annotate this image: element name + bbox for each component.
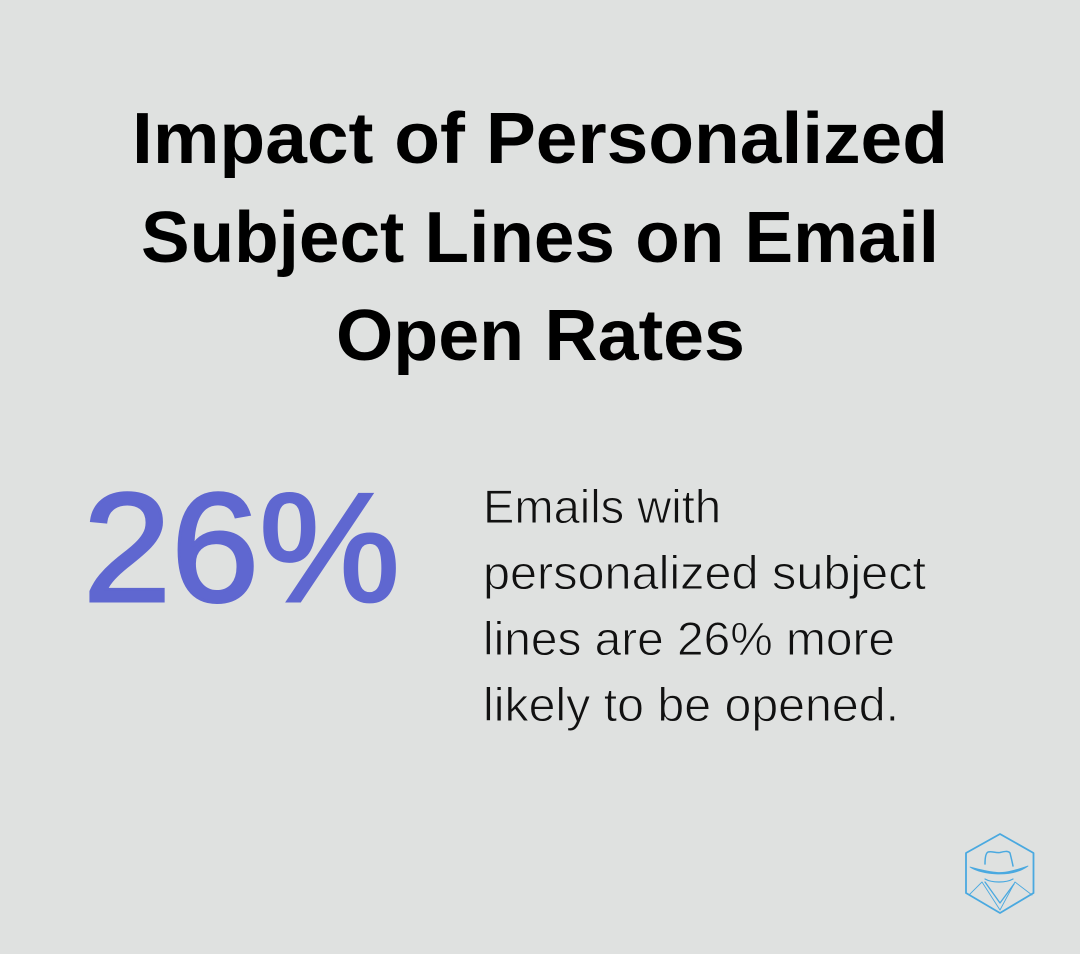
title: Open Rates bbox=[336, 296, 745, 376]
description text bbox=[483, 480, 926, 731]
title: Subject Lines on Email bbox=[141, 198, 939, 278]
title: Impact of Personalized bbox=[132, 99, 948, 179]
title bbox=[132, 99, 948, 376]
icon: hexagon logo with hat bbox=[966, 834, 1034, 913]
description text: likely to be opened. bbox=[483, 678, 899, 731]
description text: Emails with bbox=[483, 480, 721, 533]
description text: lines are 26% more bbox=[483, 612, 895, 665]
statistic: 26%: 26% bbox=[83, 461, 400, 634]
description text: personalized subject bbox=[483, 546, 926, 599]
